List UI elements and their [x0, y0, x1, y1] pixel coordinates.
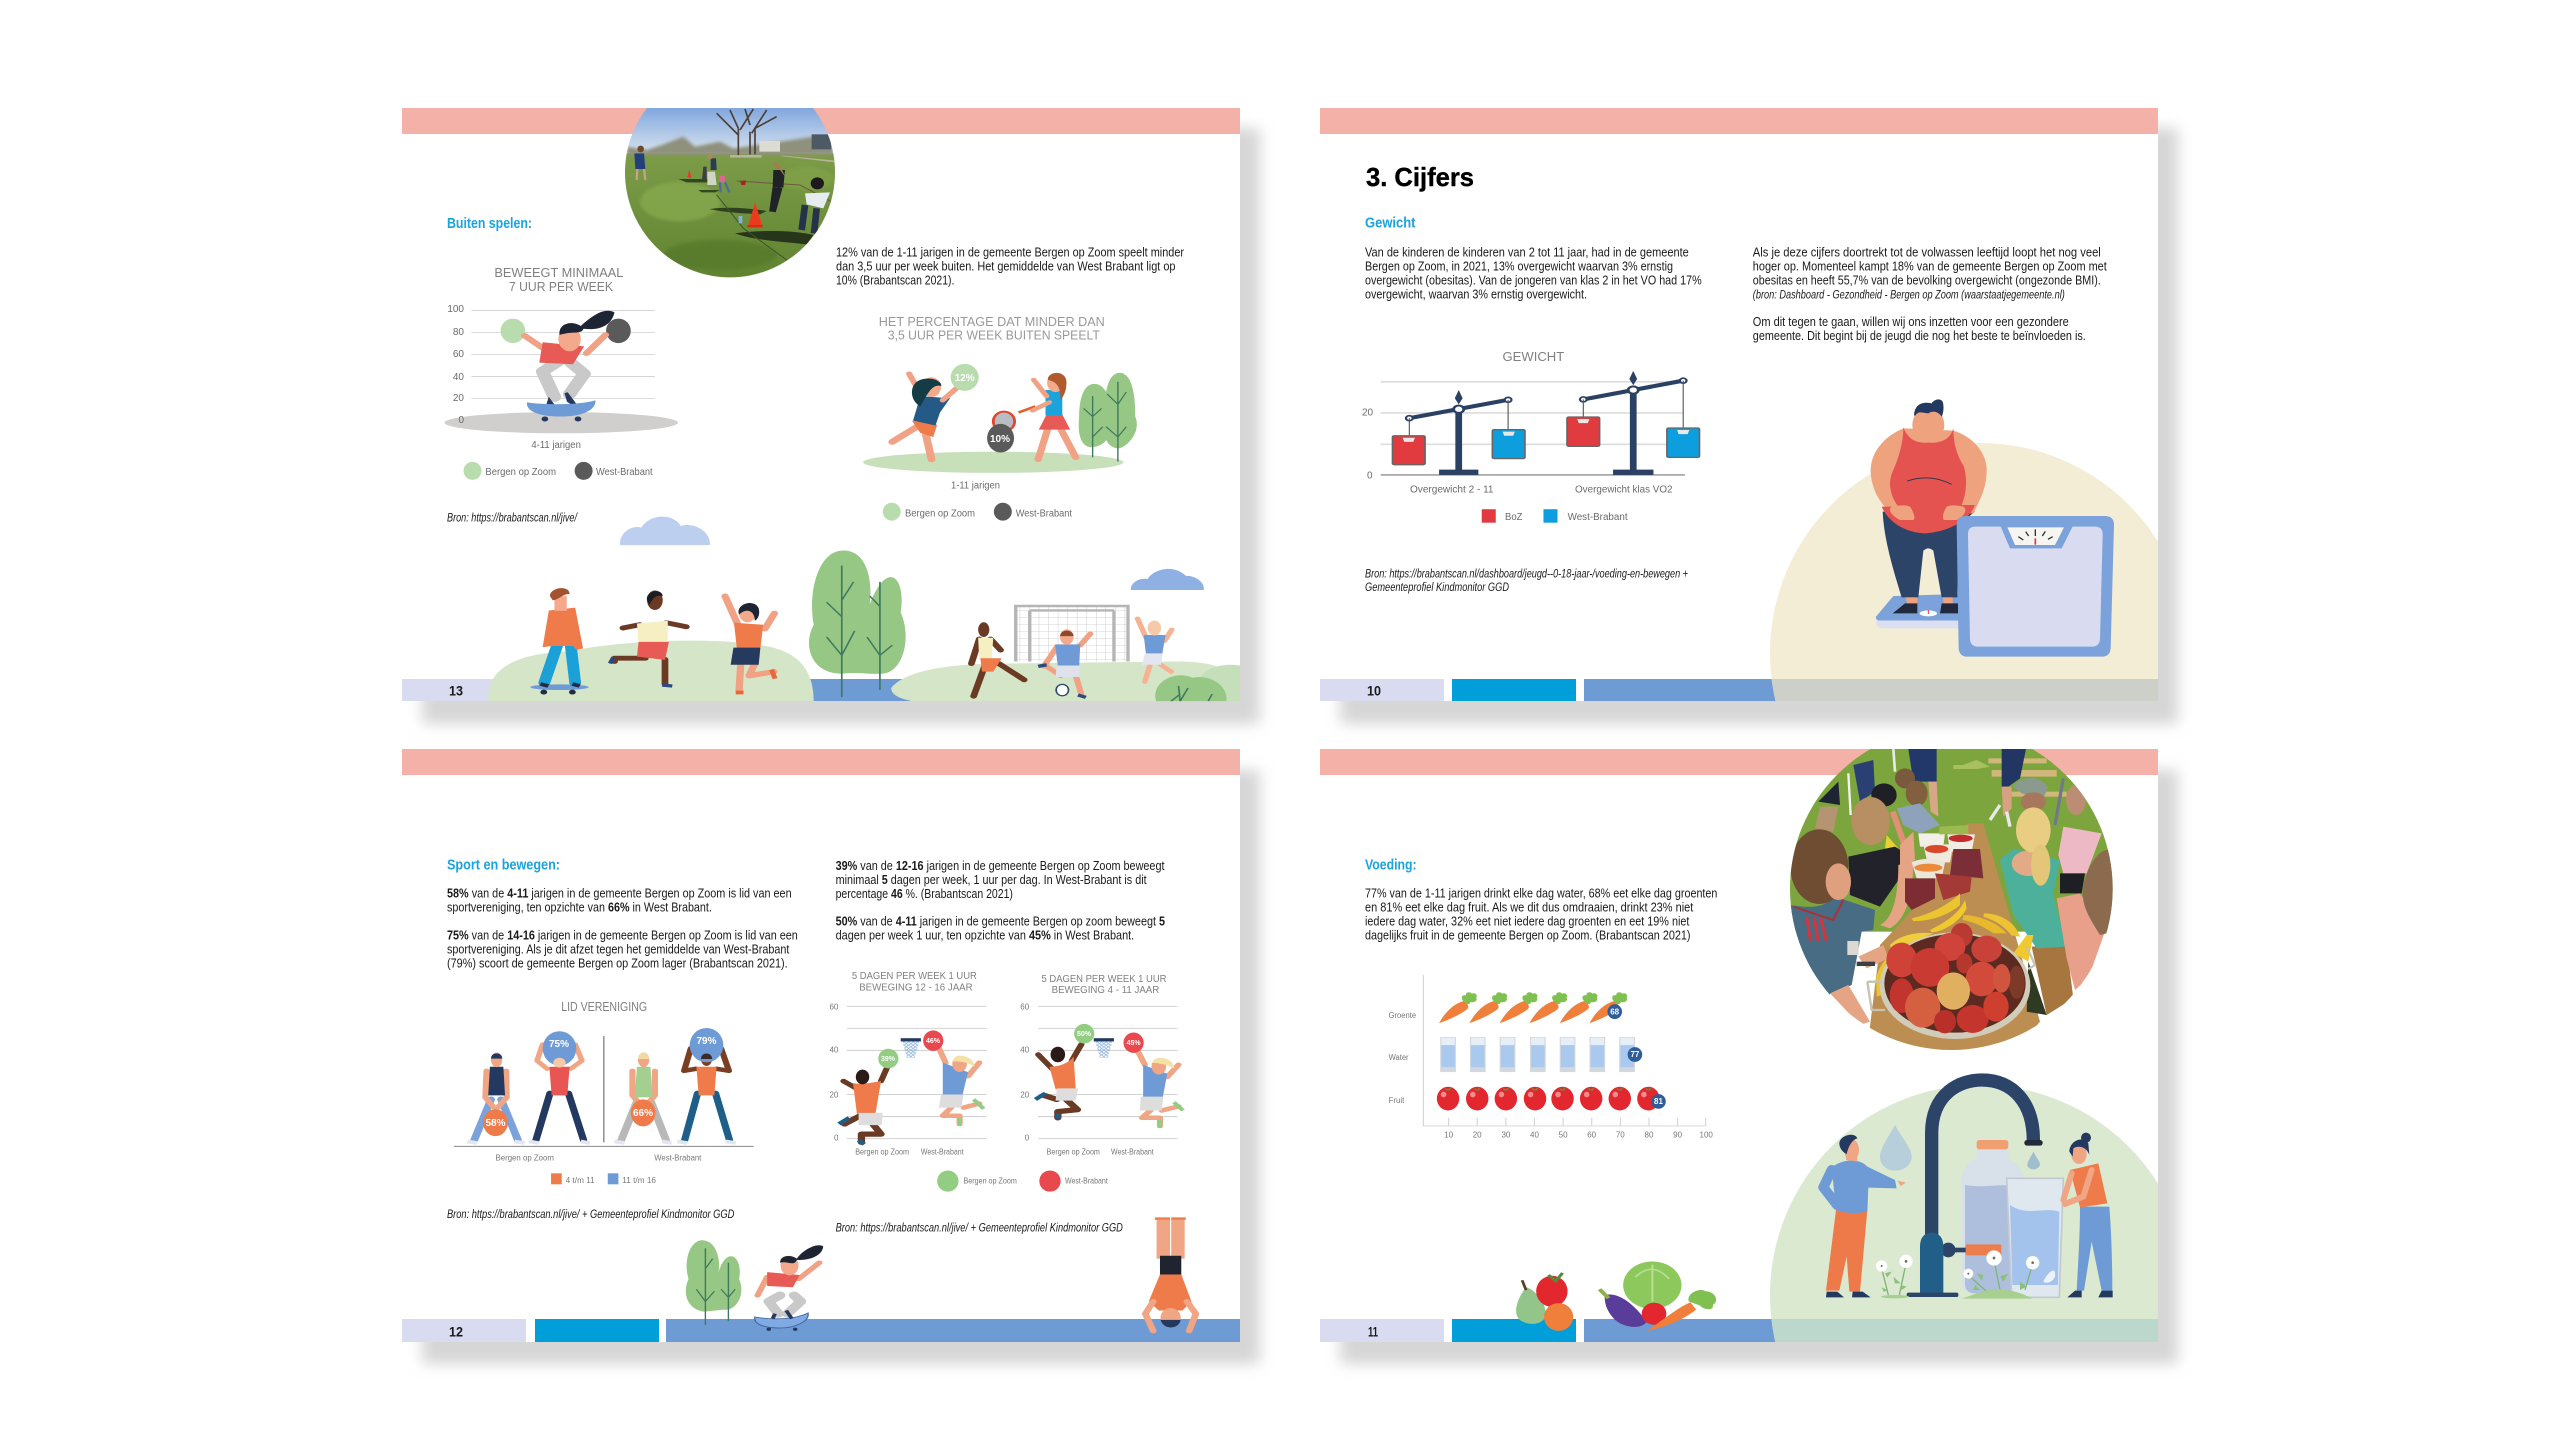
chart title: beweegt minimaal	[494, 266, 623, 294]
heading: Voeding: Voeding:	[1365, 858, 1417, 874]
jumping kid right	[1138, 619, 1172, 682]
photo: outdoor game on grass	[625, 108, 835, 278]
bubble values sport charts: 50%	[1077, 1031, 1092, 1038]
balance scale Overgewicht 2-11	[1392, 390, 1525, 475]
legend labels sport: Bergen op Zoom	[964, 1176, 1017, 1185]
chart title: lid vereniging: LID VERENIGING	[561, 1000, 647, 1014]
photo: children at fruit table	[1780, 745, 2127, 1053]
axis labels left: 40	[829, 1046, 839, 1055]
axis caption: 4-11 jarigen: 4-11 jarigen	[531, 440, 581, 451]
paragraph right: (bron: Dashboard - Gezondheid - Bergen op Zoom (waarstaatjegemeente.nl)	[1753, 290, 2065, 302]
values lid vereniging	[485, 1036, 717, 1129]
legend labels lid vereniging: 11 t/m 16	[622, 1176, 657, 1185]
ball 58	[483, 1109, 508, 1136]
artwork page 11	[1423, 975, 1716, 1331]
footer strip	[402, 1319, 1240, 1342]
kid on skateboard	[530, 588, 589, 695]
heading: Gewicht: Gewicht	[1365, 216, 1416, 232]
chart title: percentage buiten	[879, 315, 1105, 342]
paragraph right 1	[836, 858, 1165, 901]
chart title: beweegt minimaal: BEWEEGT MINIMAAL	[494, 266, 623, 280]
row fruit apples	[1437, 1086, 1666, 1110]
axis caption: 1-11 jarigen: 1-11 jarigen	[951, 481, 1000, 492]
values lid vereniging: 58%	[485, 1118, 506, 1129]
axis labels chart 1: 20	[453, 393, 464, 404]
player left chart 4-11	[1035, 1024, 1094, 1119]
page shadows	[422, 128, 2178, 1364]
row labels: Water	[1389, 1053, 1409, 1062]
x axis labels	[1444, 1130, 1713, 1140]
paragraph left: overgewicht (obesitas). Van de jongeren van klas 2 in het VO had 17%	[1365, 273, 1702, 288]
axis labels left: 0	[834, 1133, 839, 1142]
legend labels chart 1: Bergen op Zoom	[485, 467, 556, 478]
chart title: percentage buiten: 3,5 UUR PER WEEK BUITEN SPEELT	[888, 328, 1100, 342]
paragraph right 2: dagen per week 1 uur, ten opzichte van 45% in West Brabant.	[836, 927, 1134, 942]
right girl	[1038, 429, 1076, 459]
page number 12: 12	[449, 1324, 463, 1340]
paragraph right	[1753, 244, 2107, 343]
paragraph left: Bergen op Zoom, in 2021, 13% overgewicht waarvan 3% ernstig	[1365, 258, 1673, 274]
legend labels chart 2: Bergen op Zoom	[905, 508, 975, 520]
paragraph right: gemeente. Dit begint bij de jeugd die nog het beste te beïnvloeden is.	[1753, 328, 2086, 343]
handstand figure	[1145, 1219, 1196, 1331]
chart title right: 5 DAGEN PER WEEK 1 UUR	[1042, 974, 1166, 985]
chart grid right	[1038, 1006, 1177, 1139]
data circle Bergen op Zoom	[501, 319, 525, 343]
x axis labels: 40	[1530, 1130, 1539, 1140]
source page 10: Bron: https://brabantscan.nl/dashboard/jeugd--0-18-jaar-/voeding-en-bewegen +	[1365, 568, 1688, 580]
fruit illustration: pear, apple, orange	[1516, 1273, 1573, 1331]
categories left: West-Brabant	[921, 1148, 964, 1157]
paragraph: buiten spelen: 12% van de 1-11 jarigen in de gemeente Bergen op Zoom speelt minder	[836, 244, 1185, 260]
page 13: buiten spelen	[402, 105, 1240, 701]
paragraph: voeding: en 81% eet elke dag fruit. Als we dit dus omdraaien, drinkt 23% niet	[1365, 900, 1694, 915]
axis labels chart 1: 0	[458, 415, 464, 426]
categories right	[1047, 1148, 1154, 1157]
category labels gewicht: Overgewicht 2 - 11	[1410, 484, 1494, 495]
top band	[1320, 108, 2158, 134]
trees center	[809, 550, 906, 697]
paragraph left 1	[447, 885, 792, 915]
cloud right	[1131, 569, 1204, 590]
axis labels left	[829, 1002, 839, 1142]
skater footer	[755, 1245, 823, 1331]
chart grid left	[847, 1006, 987, 1139]
x axis labels: 70	[1616, 1130, 1625, 1140]
cloud left	[620, 517, 710, 545]
legend labels sport	[964, 1176, 1108, 1185]
page background	[1320, 749, 2158, 1342]
footer strip	[1320, 1319, 2158, 1342]
x axis labels: 60	[1587, 1130, 1597, 1140]
paragraph right 2	[836, 914, 1165, 942]
legend swatches	[1482, 509, 1557, 523]
apples	[2009, 966, 2025, 999]
paragraph right 1: minimaal 5 dagen per week, 1 uur per dag. In West-Brabant is dit	[836, 872, 1147, 887]
figure: man Bergen op Zoom 4-11	[467, 1052, 525, 1143]
paragraph: voeding: dagelijks fruit in de gemeente Bergen op Zoom. (Brabantscan 2021)	[1365, 927, 1690, 942]
figure: man West-Brabant 11-16	[677, 1028, 736, 1143]
heading: Sport en bewegen: Sport en bewegen:	[447, 858, 560, 874]
footer strip	[1320, 679, 2158, 701]
ball 66	[631, 1099, 655, 1126]
legend circles chart 1	[464, 462, 593, 480]
woman with orange top	[2063, 1133, 2113, 1297]
big water drop	[1880, 1125, 1912, 1171]
heading: Buiten spelen: Buiten spelen:	[447, 216, 532, 232]
hill left	[488, 641, 814, 701]
legend labels lid vereniging: 4 t/m 11	[566, 1176, 595, 1185]
paragraph left 2: 75% van de 14-16 jarigen in de gemeente Bergen op Zoom is lid van een	[447, 927, 798, 942]
paragraph left	[1365, 244, 1702, 302]
categories left	[855, 1148, 964, 1157]
left girl	[892, 425, 932, 459]
page background	[1320, 108, 2158, 701]
values lid vereniging: 75%	[549, 1039, 569, 1050]
axis labels right: 40	[1020, 1046, 1030, 1055]
small drop	[2027, 1152, 2040, 1169]
illustration: water scene	[1823, 1080, 2113, 1299]
paragraph: voeding	[1365, 885, 1717, 942]
chart title left	[852, 971, 977, 993]
artwork page 12	[454, 1006, 1196, 1331]
data bubble 12	[951, 364, 979, 391]
children right	[2058, 827, 2102, 873]
illustration: two girls playing tennis	[863, 364, 1137, 473]
categories right: Bergen op Zoom	[1047, 1148, 1100, 1157]
categories lid vereniging	[496, 1154, 702, 1162]
green dome	[1770, 1086, 2158, 1342]
page 10: cijfers gewicht	[1320, 108, 2158, 701]
player right chart 12-16	[923, 1030, 984, 1126]
page 12: sport en bewegen	[402, 749, 1240, 1342]
bubble values sport charts: 46%	[926, 1038, 941, 1045]
data bubble 10	[987, 424, 1014, 452]
legend circles sport	[937, 1170, 1061, 1192]
bubble 50	[1074, 1024, 1094, 1043]
balance chart grid	[1381, 382, 1683, 444]
trees	[1079, 384, 1112, 447]
pictogram chart axes	[1423, 975, 1706, 1126]
paragraph: voeding: 77% van de 1-11 jarigen drinkt elke dag water, 68% eet elke dag groenten	[1365, 885, 1717, 900]
value 12 percent: 12%	[955, 373, 975, 384]
man with blue sweater	[1823, 1135, 1906, 1297]
chart title: beweegt minimaal: 7 UUR PER WEEK	[509, 280, 614, 294]
ball 79	[690, 1028, 723, 1062]
jumping kid	[725, 596, 775, 693]
goalkeeper kid	[1038, 629, 1090, 697]
axis labels gewicht	[1362, 408, 1374, 482]
artwork page 13	[444, 310, 1240, 701]
fruit bowl	[1880, 932, 2030, 1039]
top band	[402, 108, 1240, 134]
paragraph left 2	[447, 927, 798, 971]
chart title: percentage buiten: HET PERCENTAGE DAT MINDER DAN	[879, 315, 1105, 329]
paragraph right 1: 39% van de 12-16 jarigen in de gemeente Bergen op Zoom beweegt	[836, 858, 1165, 873]
paragraph: buiten spelen	[836, 244, 1185, 288]
soccer player left	[971, 622, 1024, 696]
values lid vereniging: 79%	[696, 1036, 717, 1047]
x axis labels: 90	[1673, 1130, 1683, 1140]
axis labels right: 0	[1025, 1133, 1030, 1142]
legend swatches lid vereniging	[551, 1173, 618, 1184]
bushes	[1155, 665, 1240, 701]
bar West-Brabant VO2	[1667, 428, 1699, 457]
paragraph left 1: 58% van de 4-11 jarigen in de gemeente Bergen op Zoom is lid van een	[447, 885, 792, 900]
page number 11: 11	[1368, 1324, 1378, 1340]
paragraph right: Als je deze cijfers doortrekt tot de volwassen leeftijd loopt het nog veel	[1753, 244, 2101, 260]
axis labels chart 1: 80	[453, 327, 464, 338]
chart title: gewicht: GEWICHT	[1502, 350, 1565, 364]
badge values: 68	[1610, 1008, 1620, 1016]
legend labels chart 1	[485, 467, 653, 478]
player left chart 12-16	[839, 1049, 898, 1144]
soccer goal	[1016, 606, 1128, 661]
children left	[1895, 768, 1915, 788]
axis labels right: 20	[1020, 1090, 1030, 1100]
paragraph right: hoger op. Momenteel kampt 18% van de gemeente Bergen op Zoom met	[1753, 258, 2107, 274]
cream dome	[1770, 443, 2158, 701]
source right page 12: Bron: https://brabantscan.nl/jive/ + Gemeenteprofiel Kindmonitor GGD	[836, 1223, 1123, 1235]
source page 10	[1365, 568, 1688, 594]
bubble values sport charts: 45%	[1127, 1040, 1141, 1047]
bathroom scale	[1957, 516, 2114, 657]
bar West-Brabant 2-11	[1492, 430, 1525, 459]
top band	[402, 749, 1240, 775]
badge values	[1610, 1008, 1663, 1106]
value 10 percent: 10%	[990, 434, 1010, 445]
row groente carrots	[1439, 992, 1627, 1023]
basketball hoops	[901, 1038, 1114, 1058]
legend labels sport: West-Brabant	[1065, 1176, 1108, 1185]
category labels gewicht: Overgewicht klas VO2	[1575, 484, 1673, 495]
chart title left: BEWEGING 12 - 16 JAAR	[859, 982, 973, 993]
axis labels chart 1: 60	[453, 349, 464, 360]
axis labels chart 1	[447, 304, 464, 426]
categories left: Bergen op Zoom	[855, 1148, 909, 1157]
racket	[1019, 406, 1035, 412]
categories lid vereniging: Bergen op Zoom	[496, 1154, 554, 1162]
ground ellipse	[444, 412, 678, 433]
x axis labels: 100	[1700, 1130, 1713, 1140]
paragraph left 2: (79%) scoort de gemeente Bergen op Zoom lager (Brabantscan 2021).	[447, 956, 788, 971]
x axis labels: 80	[1645, 1130, 1654, 1140]
legend labels gewicht	[1505, 512, 1628, 523]
row water glasses	[1440, 1037, 1642, 1072]
artwork page 10	[1381, 371, 1699, 523]
bar BoZ VO2	[1567, 417, 1600, 446]
bubble 39	[878, 1049, 898, 1068]
x axis labels: 10	[1444, 1130, 1454, 1140]
axis labels left: 20	[829, 1090, 839, 1100]
bubble 46	[923, 1030, 943, 1051]
axis labels gewicht: 20	[1362, 408, 1374, 419]
hill right	[891, 661, 1240, 701]
badge values: 77	[1630, 1050, 1640, 1059]
chart: grid lines 7 uur	[471, 310, 655, 399]
source page 10: Gemeenteprofiel Kindmonitor GGD	[1365, 582, 1509, 594]
paragraph right 1: percentage 46 %. (Brabantscan 2021)	[836, 886, 1013, 901]
legend labels gewicht: West-Brabant	[1568, 512, 1628, 523]
table	[1867, 823, 2040, 1053]
paragraph left 1: sportvereniging, ten opzichte van 66% in West Brabant.	[447, 900, 712, 915]
x axis labels: 30	[1501, 1130, 1511, 1140]
footer strip	[402, 679, 970, 701]
legend circles chart 2	[883, 503, 1012, 521]
axis labels right: 60	[1020, 1002, 1030, 1011]
bubble 45	[1123, 1032, 1144, 1053]
paragraph left: Van de kinderen de kinderen van 2 tot 11 jaar, had in de gemeente	[1365, 244, 1689, 260]
bar BoZ 2-11	[1392, 436, 1425, 465]
top band	[1320, 749, 2158, 775]
lid vereniging baseline and divider	[454, 1036, 754, 1146]
bowls on table	[1918, 833, 1945, 847]
ball 75	[543, 1031, 576, 1066]
page 11: voeding	[1320, 749, 2158, 1342]
page background	[402, 749, 1240, 1342]
axis labels left: 60	[829, 1002, 839, 1011]
legend labels lid vereniging	[566, 1176, 657, 1185]
source left page 12: Bron: https://brabantscan.nl/jive/ + Gemeenteprofiel Kindmonitor GGD	[447, 1209, 734, 1221]
flowers and mound	[1876, 1250, 2055, 1299]
page number 13: 13	[449, 682, 463, 698]
axis labels right	[1020, 1002, 1030, 1142]
categories right: West-Brabant	[1111, 1148, 1154, 1157]
chart title right	[1042, 974, 1166, 996]
axis labels chart 1: 40	[453, 372, 464, 383]
category labels gewicht	[1410, 484, 1673, 495]
source page 13: Bron: https://brabantscan.nl/jive/	[447, 512, 578, 524]
figure: woman Bergen op Zoom 11-16	[529, 1031, 590, 1143]
legend labels chart 1: West-Brabant	[596, 467, 653, 478]
page number 10: 10	[1367, 682, 1381, 698]
vegetable illustration	[1600, 1261, 1716, 1331]
paragraph: buiten spelen: dan 3,5 uur per week buiten. Het gemiddelde van West Brabant ligt op	[836, 258, 1176, 274]
player right chart 4-11	[1123, 1032, 1183, 1128]
bananas	[1912, 893, 1960, 921]
paragraph right 2: 50% van de 4-11 jarigen in de gemeente Bergen op zoom beweegt 5	[836, 914, 1165, 928]
bubble values sport charts	[881, 1031, 1141, 1063]
row labels: Groente	[1389, 1011, 1417, 1020]
legend labels chart 2	[905, 508, 1072, 520]
paragraph right: obesitas en heeft 55,7% van de bevolking overgewicht (ongezonde BMI).	[1753, 273, 2101, 288]
axis labels chart 1: 100	[447, 304, 464, 315]
paragraph right: Om dit tegen te gaan, willen wij ons inzetten voor een gezondere	[1753, 314, 2069, 329]
chart title right: BEWEGING 4 - 11 JAAR	[1052, 985, 1159, 996]
faucet	[1907, 1080, 2043, 1297]
paragraph: voeding: iedere dag water, 32% eet niet iedere dag groenten en eet 19% niet	[1365, 914, 1690, 929]
runner	[610, 590, 686, 686]
paragraph: buiten spelen: 10% (Brabantscan 2021).	[836, 273, 954, 288]
small floor scale	[1876, 594, 1960, 621]
x axis labels: 50	[1559, 1130, 1568, 1140]
bubble values sport charts: 39%	[881, 1056, 896, 1063]
chart title left: 5 DAGEN PER WEEK 1 UUR	[852, 971, 977, 982]
x axis labels: 20	[1473, 1130, 1482, 1140]
legend labels gewicht: BoZ	[1505, 512, 1522, 523]
illustration: overweight man on scale	[1871, 399, 2114, 657]
trees footer	[686, 1240, 741, 1325]
legend labels chart 2: West-Brabant	[1016, 508, 1072, 520]
axis labels gewicht: 0	[1367, 470, 1373, 482]
categories lid vereniging: West-Brabant	[654, 1154, 702, 1162]
illustration: skater with data circles	[501, 311, 631, 421]
row labels	[1389, 1011, 1417, 1105]
page background	[402, 108, 1240, 701]
row labels: Fruit	[1389, 1096, 1405, 1105]
badge values: 81	[1654, 1097, 1663, 1106]
paragraph left: overgewicht, waarvan 3% ernstig overgewicht.	[1365, 287, 1587, 302]
bottle	[1962, 1140, 2023, 1293]
balance scale Overgewicht VO2	[1567, 371, 1699, 475]
data circle West-Brabant	[606, 319, 631, 343]
water glass	[2007, 1178, 2063, 1297]
paragraph left 2: sportvereniging. Als je dit afzet tegen het gemiddelde van West-Brabant	[447, 941, 790, 956]
values lid vereniging: 66%	[633, 1108, 653, 1119]
figure: woman West-Brabant 4-11	[614, 1052, 672, 1143]
title: 3. Cijfers: 3. Cijfers	[1366, 162, 1474, 192]
